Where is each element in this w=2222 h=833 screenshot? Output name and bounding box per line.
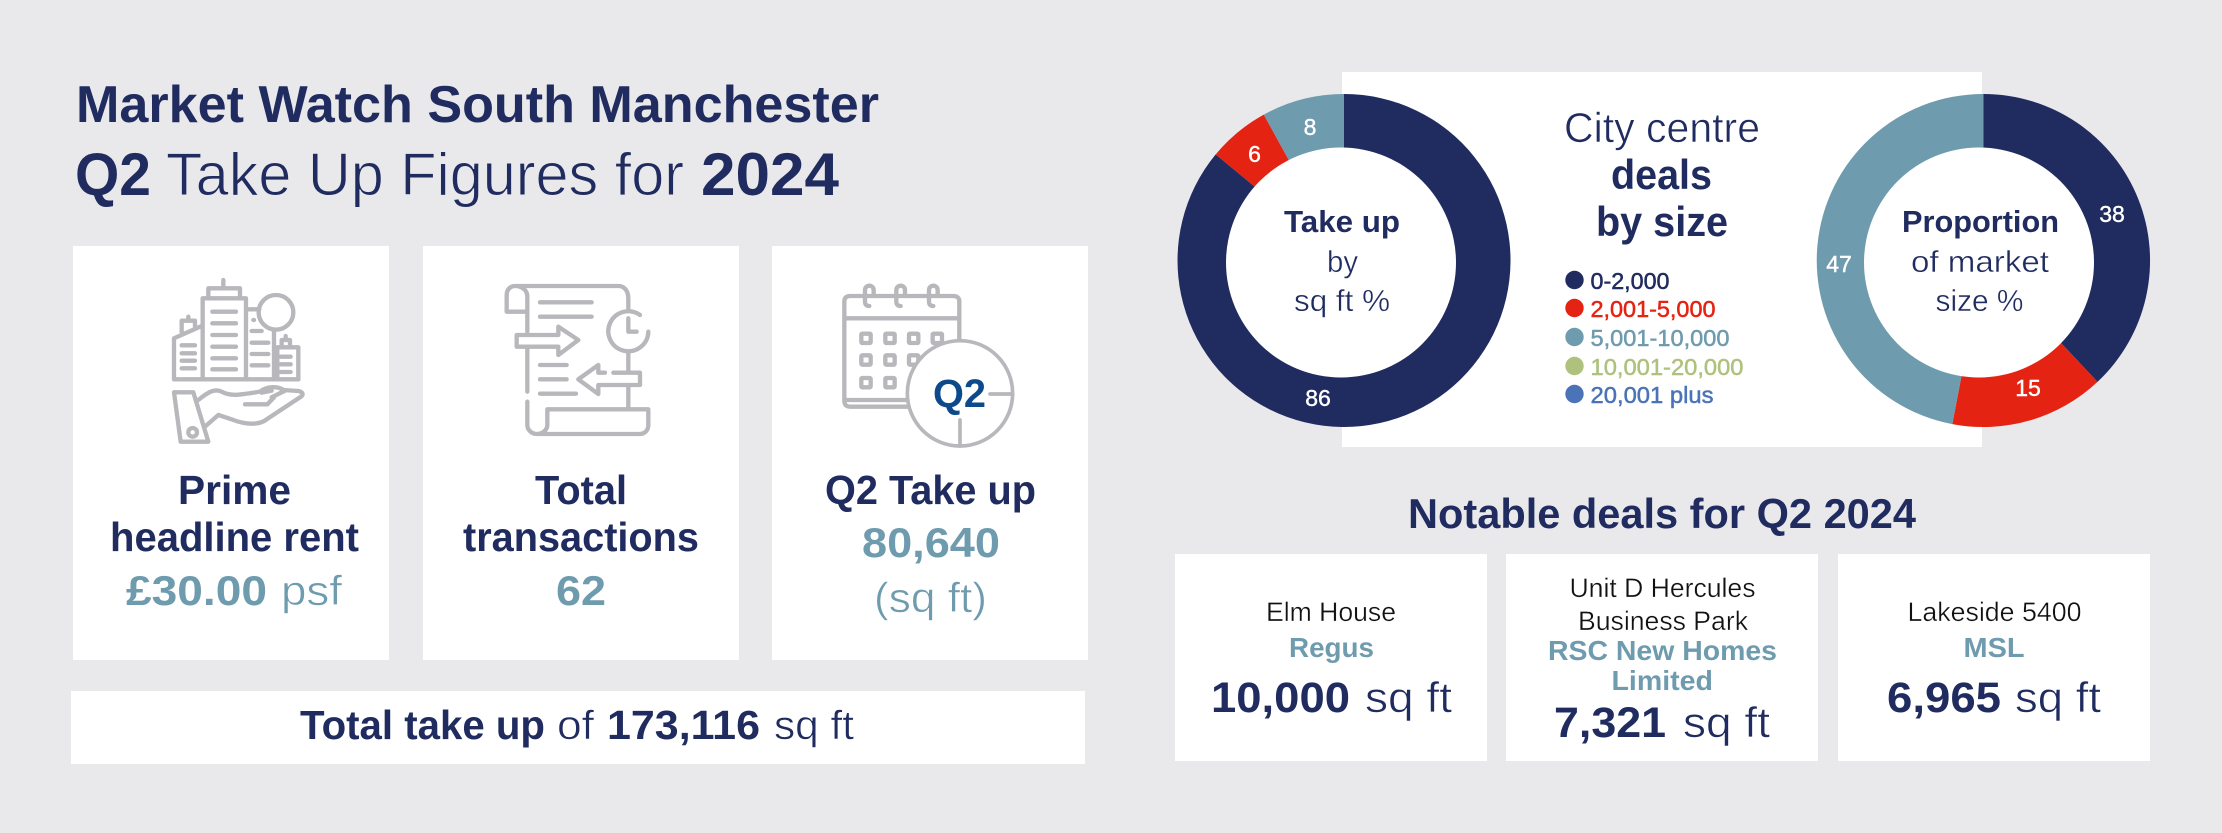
heading [1564,104,1760,245]
panel: deal Elm House: 10,000 [1211,674,1350,722]
panel: deal Lakeside 5400: 6,965 [1887,674,2001,722]
heading: by size [1596,198,1728,245]
panel: deal Unit D Hercules [1506,554,1818,761]
panel: total take up bar: Total take up [300,702,545,748]
title line 1: Market Watch South Manchester [76,76,879,134]
card label: Prime [178,467,291,513]
title line 2: Q2 [75,141,151,208]
donut centre label: sq ft % [1294,283,1390,318]
panel: prime headline rent [73,246,389,660]
panel: deal Lakeside 5400: Lakeside 5400 [1908,597,2082,627]
card label: Total [535,467,627,513]
heading: deals [1611,151,1712,198]
card value: £30.00 [126,567,267,614]
panel: q2 take up [772,246,1088,660]
card label: Q2 Take up [825,467,1036,513]
panel: total take up bar: 173,116 [607,702,760,748]
heading: City centre [1564,104,1760,151]
panel: deal Elm House [1175,554,1487,761]
card value: 80,640 [862,519,1000,566]
legend: 10,001-20,000 [1590,354,1744,380]
title line 2: Take Up Figures for [166,141,684,208]
donut chart: take up by sq ft: 86 [1305,385,1331,411]
panel: total transactions [423,246,739,660]
title line 2 [75,141,840,208]
panel: total transactions: transactions [463,514,699,560]
icon: scroll with arrows and clock [507,286,648,434]
legend: 20,001 plus [1590,382,1714,408]
legend: 5,001-10,000 [1590,325,1730,351]
icon: buildings on a hand [174,280,303,442]
panel: deal Lakeside 5400 [1838,554,2150,761]
legend [1565,268,1744,408]
title [75,76,879,208]
donut chart: take up by sq ft: 8 [1304,114,1316,140]
panel: deal Lakeside 5400: sq ft [2015,674,2101,722]
donut centre label: by [1327,244,1358,279]
icon: calendar with Q2 dial [844,286,1013,446]
panel: deal Elm House: sq ft [1365,674,1452,722]
panel: total take up bar [71,691,1085,764]
panel: total take up bar: of [557,702,595,748]
panel: deal Unit D Hercules: 7,321 [1554,699,1666,747]
panel: deal Unit D Hercules: Business Park [1578,606,1748,636]
panel: city centre deals by size [1342,72,1982,447]
panel: deal Unit D Hercules: Unit D Hercules [1570,573,1756,603]
donut chart: proportion of market size [1817,94,2150,427]
panel: deal Unit D Hercules: RSC New Homes [1548,635,1777,666]
legend: 0-2,000 [1590,268,1670,294]
donut centre label: Proportion [1902,204,2059,239]
panel: deal Elm House: Regus [1289,632,1374,663]
donut chart: take up by sq ft [1178,94,1511,427]
panel: deal Unit D Hercules: Limited [1612,665,1713,696]
card unit: (sq ft) [874,574,987,621]
donut chart: proportion of market size: 38 [2099,201,2125,227]
card value [126,567,342,614]
donut chart: take up by sq ft: 6 [1248,141,1261,167]
icon: calendar with Q2 dial: Q2 [933,372,986,416]
legend: 2,001-5,000 [1590,296,1716,322]
panel: total take up bar: sq ft [774,702,855,748]
donut chart: proportion of market size: 15 [2015,375,2041,401]
donut centre label: Take up [1284,204,1400,239]
donut centre label: size % [1936,283,2024,318]
panel: prime headline rent: headline rent [110,514,359,560]
title line 2: 2024 [701,141,840,208]
donut centre label: of market [1911,244,2049,279]
card value: psf [281,567,342,614]
donut centre label [1284,204,1400,318]
panel: deal Elm House: Elm House [1266,597,1396,627]
card value: 62 [556,567,606,614]
heading: notable deals: Notable deals for Q2 2024 [1408,490,1917,537]
donut chart: proportion of market size: 47 [1826,251,1852,277]
panel: deal Unit D Hercules: sq ft [1683,699,1770,747]
donut centre label [1902,204,2059,318]
panel: deal Lakeside 5400: MSL [1964,632,2024,663]
